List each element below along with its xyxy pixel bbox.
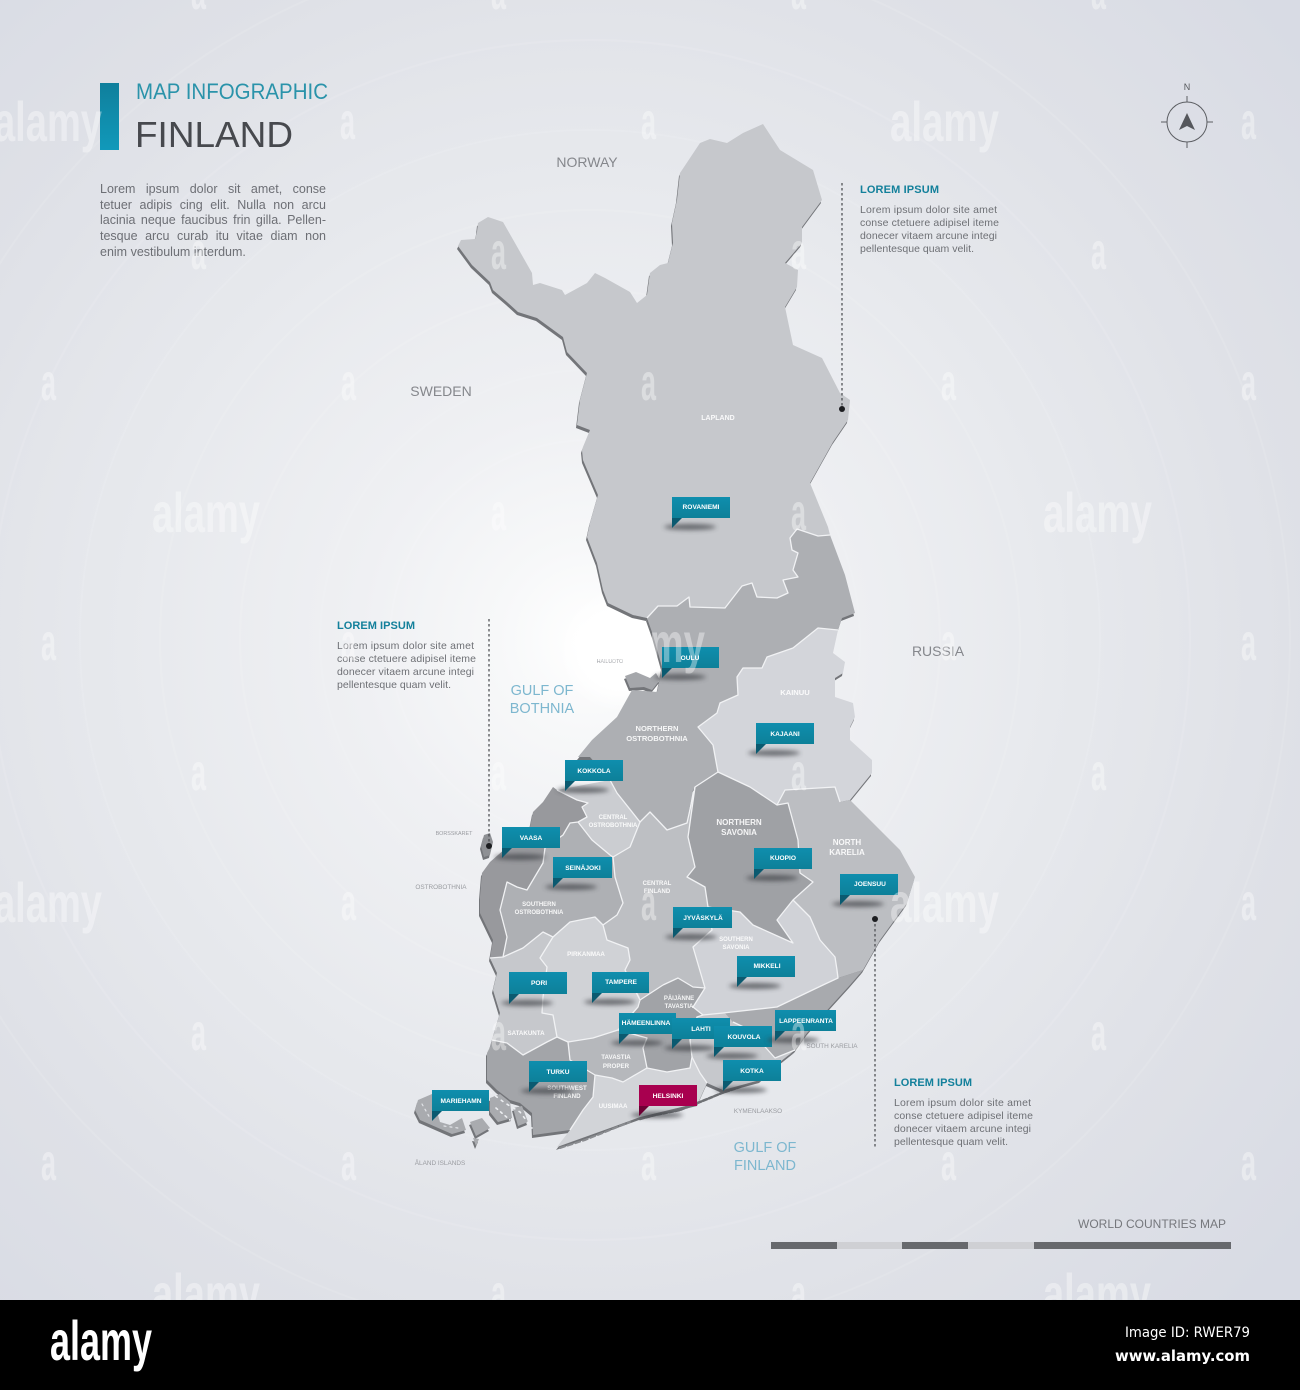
watermark text: a [191,1004,207,1062]
compass north label: N [1184,82,1190,92]
compass [1161,82,1213,148]
flag: Jyväskylä [665,907,732,940]
flag: Kuopio: KUOPIO [770,855,796,862]
callout: south east: donecer vitaem arcune integi [894,1123,1031,1135]
islands: Hailuoto [625,672,660,690]
region labels: FINLAND [553,1093,581,1100]
footer url: www.alamy.com [1115,1347,1250,1365]
flag: Kotka: KOTKA [740,1068,764,1075]
watermark text: a [791,1004,807,1062]
flag: Hämeenlinna: HÄMEENLINNA [622,1019,671,1027]
region labels: LAPLAND [701,415,735,422]
flag: Lahti [664,1018,730,1051]
title block [100,79,328,155]
callout: south east [872,916,1033,1148]
region labels: NORTHERN [635,724,679,733]
callout: north east: Lorem ipsum dolor site amet [860,204,997,216]
flag: Mariehamn [432,1090,489,1121]
flag: Lappeenranta: LAPPEENRANTA [779,1018,833,1025]
flag: Rovaniemi: ROVANIEMI [683,504,720,511]
callout: north east: LOREM IPSUM [860,184,939,196]
flag: Helsinki capital [631,1085,697,1118]
watermark text: alamy [890,871,999,934]
eyebrow heading: MAP INFOGRAPHIC [136,79,328,104]
flag: Tampere [584,972,649,1005]
archipelago coast detail [422,1087,740,1148]
intro paragraph: tetuer adipis cing elit. Nulla non arcu [100,198,326,212]
flag: Helsinki capital: HELSINKI [653,1093,684,1100]
flag: Joensuu: JOENSUU [854,881,886,888]
flag: Lappeenranta [767,1010,836,1043]
callout: west: donecer vitaem arcune integi [337,666,474,678]
region labels: SOUTHERN [522,902,556,908]
flag: Pori: PORI [531,980,547,987]
region labels: OSTROBOTHNIA [589,823,638,829]
intro paragraph: tesque arcu curab itu vitae diam non [100,229,326,243]
region labels: CENTRAL [643,881,672,887]
watermark text: a [491,744,507,802]
watermark text: a [491,484,507,542]
watermark text: a [341,874,357,932]
watermark text: a [941,354,957,412]
flag: Tampere: TAMPERE [605,979,637,986]
region labels: OSTROBOTHNIA [626,734,688,743]
region: North Karelia [777,787,915,978]
watermark text: alamy [1043,481,1152,544]
region: Päijänne Tavastia and Kanta-Häme [618,978,705,1072]
watermark text: alamy [1043,1262,1151,1325]
flag: Kajaani [748,723,814,756]
region labels: SOUTHWEST [547,1085,587,1092]
region: South Karelia [725,970,863,1058]
gulf of finland label: GULF OF [734,1140,797,1156]
callout: north east: donecer vitaem arcune integi [860,230,997,242]
region labels: SAVONIA [721,828,757,837]
callout: north east: pellentesque quam velit. [860,243,974,255]
footer logo: alamy [50,1309,152,1372]
watermark text: a [1241,93,1257,151]
watermark text: a [1241,354,1257,412]
watermark text: a [791,1265,807,1323]
scale caption: WORLD COUNTRIES MAP [1078,1217,1226,1231]
flag: Mikkeli: MIKKELI [753,963,781,970]
intro paragraph: lacinia neque faucibus frin gilla. Pellen- [100,213,326,227]
gulf of bothnia label: GULF OF [511,683,574,699]
watermark text: a [41,1134,57,1192]
outside region labels: SOUTH KARELIA [806,1043,858,1050]
flag: Vaasa [494,827,560,860]
flag: Kouvola [706,1026,772,1059]
outside region labels: OSTROBOTHNIA [415,884,467,891]
flag: Jyväskylä: JYVÄSKYLÄ [683,914,723,922]
footer bar [0,1300,1300,1390]
callout: north east: conse ctetuere adipisel iteme [860,217,999,229]
flag: Pori [501,972,567,1006]
watermark text: a [641,1134,657,1192]
region: Northern Ostrobothnia [578,529,855,830]
region labels: SAVONIA [723,945,750,951]
flag: Kotka [715,1060,781,1093]
region: Northern Savonia [687,772,813,943]
flag: Oulu: OULU [681,655,700,662]
watermark text: a [941,614,957,672]
region labels [507,415,865,1110]
region: Pirkanmaa [540,917,640,1042]
intro paragraph [100,182,326,264]
islands: Aland [415,1094,528,1146]
region: Southern Savonia [693,900,838,1015]
flag: Lahti: LAHTI [691,1026,711,1033]
region labels: TAVASTIA [665,1004,694,1010]
flag: Kokkola [557,760,623,793]
watermark text: alamy [890,90,999,153]
region labels: OSTROBOTHNIA [515,910,564,916]
callout: south east: conse ctetuere adipisel iteme [894,1110,1033,1122]
watermark text: a [641,93,657,151]
flag: Joensuu [832,874,898,907]
flag: Turku: TURKU [546,1069,570,1076]
region labels: PROPER [603,1063,630,1070]
callout: north east [839,183,999,412]
gulf of finland label [734,1140,797,1174]
callout: west: LOREM IPSUM [337,620,415,632]
region: Uusimaa [557,1057,707,1147]
flag: Oulu [654,647,719,680]
flag: Vaasa: VAASA [520,835,543,842]
watermark text: a [1241,874,1257,932]
intro paragraph: Lorem ipsum dolor sit amet, conse [100,182,326,196]
watermark text: a [1091,744,1107,802]
watermark text: a [41,354,57,412]
flag: Kouvola: KOUVOLA [728,1034,761,1041]
footer image id: Image ID: RWER79 [1125,1325,1250,1341]
callout: south east: Lorem ipsum dolor site amet [894,1097,1031,1109]
outside region labels: ÅLAND ISLANDS [415,1158,465,1167]
region: Lapland [458,124,850,618]
watermark text: alamy [152,481,260,544]
region labels: SOUTHERN [719,937,753,943]
white glow near Hailuoto [558,588,682,712]
watermark text: a [641,874,657,932]
region labels: NORTH [833,838,861,847]
outside region labels [415,659,858,1167]
callout: west [337,619,492,849]
flag: Mikkeli [729,956,795,989]
watermark text: a [41,614,57,672]
country title: FINLAND [135,114,293,155]
flag: Kajaani: KAJAANI [770,731,800,738]
gulf of finland label: FINLAND [734,1158,796,1174]
region labels: PÄIJÄNNE [664,995,694,1002]
callout: south east: LOREM IPSUM [894,1077,972,1089]
outside region labels: BORSSKARET [436,831,473,837]
flag: Turku [521,1061,587,1094]
flag: Seinäjoki: SEINÄJOKI [565,864,601,872]
region: Ostrobothnia [480,787,588,958]
callout: west: Lorem ipsum dolor site amet [337,640,474,652]
region: Central Finland [603,787,712,1000]
scale bar [771,1242,1231,1249]
region labels: TAVASTIA [601,1054,631,1061]
region labels: CENTRAL [599,815,628,821]
watermark text: a [791,744,807,802]
watermark text: a [1241,1134,1257,1192]
watermark text: alamy [596,611,705,674]
callout: south east: pellentesque quam velit. [894,1136,1008,1148]
flag: Kokkola: KOKKOLA [577,768,611,775]
neighbouring country labels: RUSSIA [912,643,965,659]
watermark text: a [341,1134,357,1192]
watermark text: alamy [152,1262,260,1325]
region: Tavastia Proper [568,1030,647,1082]
neighbouring country labels [410,154,965,659]
compass needle [1179,113,1195,130]
watermark text: a [1241,614,1257,672]
region: Kymenlaakso [690,1013,795,1090]
gulf of bothnia label: BOTHNIA [510,701,575,717]
flag: Kuopio [746,848,812,881]
region labels: SATAKUNTA [507,1030,545,1037]
intro paragraph: enim vestibulum interdum. [100,245,246,259]
watermark text: a [941,1134,957,1192]
flag: Mariehamn: MARIEHAMN [440,1098,482,1105]
island: Vaasa archipelago [481,833,493,857]
watermark text: a [641,354,657,412]
neighbouring country labels: SWEDEN [410,383,472,399]
region: Southwest Finland [487,1037,595,1135]
gulf of bothnia label [510,683,575,717]
watermark text: a [340,93,356,151]
watermark text: a [191,223,207,281]
watermark text: a [1091,223,1107,281]
region: Southern Ostrobothnia [500,822,623,957]
watermark text: a [491,1004,507,1062]
region: Satakunta [490,932,557,1055]
flag: Hämeenlinna [611,1013,676,1046]
watermark text: a [491,223,507,281]
region labels: NORTHERN [716,818,762,827]
neighbouring country labels: NORWAY [556,154,618,170]
watermark text: a [1091,1004,1107,1062]
callout: west: conse ctetuere adipisel iteme [337,653,476,665]
region labels: PIRKANMAA [567,951,605,958]
watermark text: a [491,1265,507,1323]
region labels: UUSIMAA [599,1103,628,1110]
region labels: FINLAND [644,889,671,895]
map of Finland [415,124,915,1147]
watermark text: a [791,223,807,281]
callout: west: pellentesque quam velit. [337,679,451,691]
region labels: KAINUU [780,688,810,697]
watermark text: a [191,744,207,802]
region: Central Ostrobothnia [557,780,640,857]
outside region labels: HAILUOTO [597,659,623,665]
watermark text: a [341,354,357,412]
title accent bar [100,83,119,150]
internal region borders [490,529,840,1130]
flag: Rovaniemi [664,497,730,530]
region: Kainuu [698,628,872,805]
watermark text: a [791,484,807,542]
flag: Seinäjoki [545,857,612,890]
outside region labels: KYMENLAAKSO [734,1108,782,1115]
watermark text: a [341,614,357,672]
region labels: KARELIA [829,848,865,857]
